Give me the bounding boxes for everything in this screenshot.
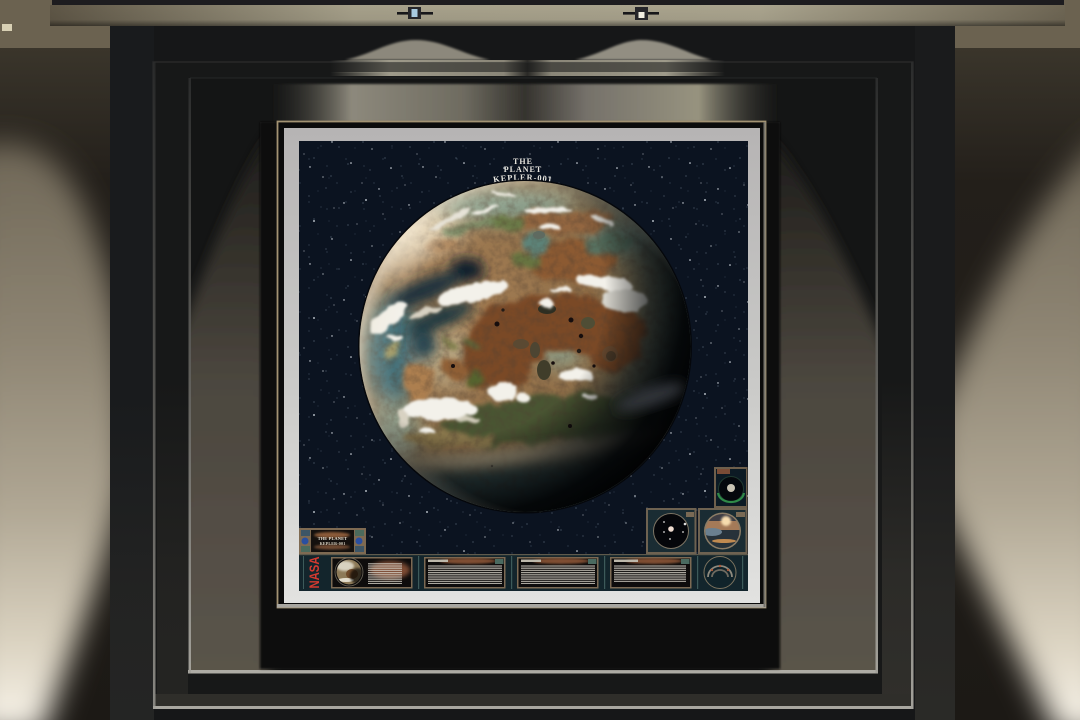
clouds (365, 192, 649, 434)
title: PLANET (504, 165, 542, 174)
shield emblem (714, 467, 748, 508)
sunrise panel (698, 508, 748, 554)
frame (277, 122, 766, 608)
poster cast shadow (260, 122, 780, 669)
solar system panel (646, 508, 696, 554)
pale lower band (415, 425, 680, 469)
rocky craters (451, 231, 618, 467)
white mat (284, 128, 760, 603)
ceiling spot: left wall (2, 24, 12, 31)
room wall: right (935, 48, 1080, 720)
green lowlands (387, 213, 650, 448)
inner moulding field (190, 78, 877, 672)
outer moulding (153, 62, 914, 709)
spot lamp 2 (623, 7, 659, 20)
terminator shadow (359, 180, 691, 512)
spot lamp 1 (397, 7, 433, 19)
dark wall panel (110, 26, 955, 720)
light band above poster (270, 84, 780, 122)
ceiling (0, 0, 1080, 48)
limb glow (359, 180, 691, 512)
light domes (345, 40, 712, 60)
title badge: THE PLANET (318, 536, 347, 541)
title (493, 157, 551, 182)
info panel 2 (424, 557, 506, 588)
title: THE (513, 157, 533, 166)
ocean and haze (362, 188, 660, 516)
bottom info strip (299, 554, 748, 591)
night clouds (613, 377, 687, 417)
round seal (704, 556, 736, 588)
title badge: KEPLER-001 (320, 541, 345, 546)
room wall: left (0, 48, 125, 720)
rust continent (403, 211, 646, 407)
info panel 4 (610, 557, 692, 588)
starfield background (299, 141, 748, 591)
title: KEPLER-001 (493, 174, 551, 182)
NASA wordmark: NASA (307, 556, 322, 588)
inner moulding lines (188, 78, 878, 674)
lit moulding strip (330, 60, 725, 76)
info panel 1 (331, 557, 412, 588)
dark storm bands (384, 258, 484, 357)
planet (355, 175, 695, 520)
surface grain (362, 182, 634, 455)
info panel 3 (517, 557, 598, 588)
framed poster (276, 120, 766, 608)
title badge (299, 528, 366, 554)
lit wall panels beside poster (191, 154, 876, 670)
